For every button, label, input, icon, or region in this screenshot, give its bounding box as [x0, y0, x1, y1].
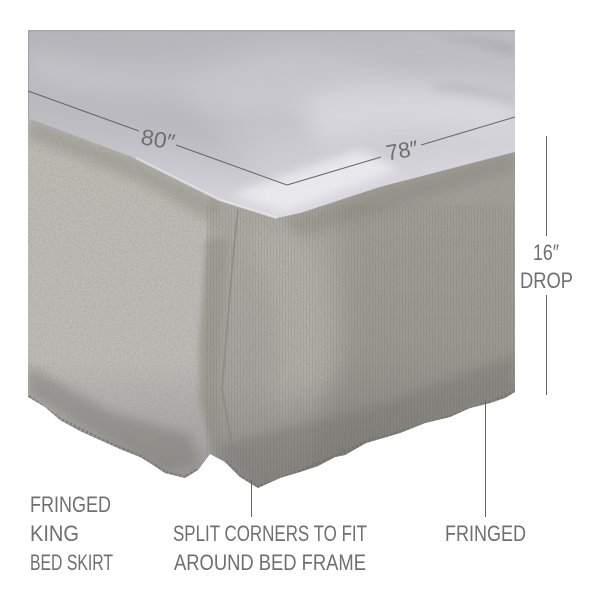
dimension: 78 inch length — [287, 117, 515, 185]
callout: split corners: AROUND BED FRAME — [174, 550, 366, 575]
right side panel — [302, 152, 515, 472]
corner seam — [222, 210, 238, 450]
product name label: KING — [30, 521, 79, 546]
dimension: 78 inch length: 78″ — [384, 135, 420, 166]
dimension: 80 inch width: 80″ — [139, 124, 177, 155]
top sheet surface — [28, 30, 515, 225]
callout: split corners — [173, 480, 367, 575]
callout: split corners: SPLIT CORNERS TO FIT — [173, 521, 367, 546]
left side panel — [28, 118, 212, 478]
product name label — [30, 492, 113, 575]
dimension: 16 inch drop: 16″ — [533, 240, 559, 265]
dimension: 16 inch drop — [520, 136, 573, 395]
sheet edge highlight — [136, 158, 277, 218]
dimension: 16 inch drop: DROP — [520, 268, 573, 293]
skirt fabric panels — [28, 118, 515, 488]
product name label: FRINGED — [30, 492, 111, 517]
corner panel highlight — [278, 249, 323, 387]
callout: fringed: FRINGED — [445, 521, 526, 546]
fabric texture — [28, 120, 335, 452]
skirt base — [28, 110, 515, 500]
fabric shading — [28, 118, 220, 222]
dimension: 80 inch width — [28, 91, 287, 185]
product photo: bed skirt on mattress — [10, 30, 530, 500]
product name label: BED SKIRT — [30, 550, 113, 575]
hem fringe — [28, 392, 515, 488]
